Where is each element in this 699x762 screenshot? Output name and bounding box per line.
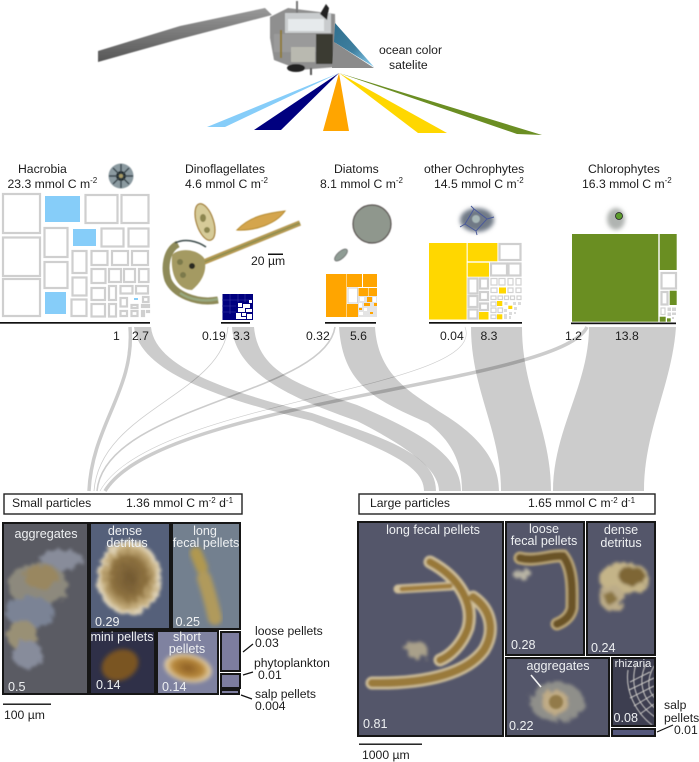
heading: Dinoflagellates — [185, 162, 265, 176]
scale bar: 100 µm — [3, 704, 51, 722]
axis — [221, 322, 250, 324]
ochrophyte image — [460, 206, 494, 235]
heading: 23.3 mmol C m — [8, 177, 90, 191]
treemap — [222, 294, 253, 320]
blue taxa — [45, 196, 138, 314]
value — [8, 527, 78, 694]
dinoflagellate micrograph — [166, 201, 300, 301]
panel: Chlorophytes — [565, 162, 677, 343]
scale bar: 20 µm: 20 µm — [251, 254, 285, 268]
labels: mini pellets — [90, 630, 154, 644]
labels: long — [193, 524, 217, 538]
panel: large dense detritus — [587, 522, 655, 655]
small minor categories: 0.004 — [255, 699, 286, 713]
heading — [8, 162, 98, 191]
labels: 0.14 — [162, 680, 187, 694]
small minor categories: 0.01 — [258, 668, 282, 682]
value: aggregates — [14, 527, 78, 541]
labels — [95, 524, 148, 629]
value: 8.3 — [480, 329, 498, 343]
labels: long fecal pellets — [386, 523, 480, 537]
labels: dense — [108, 524, 142, 538]
heading: small particles: 1.36 mmol C m — [126, 496, 209, 510]
large salp pellets: pellets — [664, 711, 699, 725]
heading: -2 — [665, 176, 672, 185]
treemap — [572, 234, 677, 322]
treemap — [326, 274, 377, 317]
labels: aggregates — [526, 659, 590, 673]
satellite body — [270, 1, 336, 75]
value: 0.32 — [306, 329, 330, 343]
heading: large particles: d — [618, 496, 628, 510]
labels — [90, 630, 154, 692]
heading: 14.5 mmol C m — [434, 177, 517, 191]
heading: small particles: -2 — [209, 496, 216, 505]
solar panel — [98, 8, 272, 62]
panel: small mini pellets — [90, 630, 155, 694]
treemap — [429, 243, 521, 320]
small minor categories: 0.03 — [255, 636, 279, 650]
labels: short — [173, 630, 201, 644]
labels: 0.08 — [614, 711, 638, 725]
labels: 0.24 — [591, 641, 616, 655]
scale bar: 1000 µm — [359, 744, 422, 762]
heading: Diatoms — [334, 162, 379, 176]
heading: large particles: -2 — [611, 496, 618, 505]
panel: small long fecal pellets — [172, 523, 240, 629]
labels: fecal pellets — [511, 534, 577, 548]
labels — [614, 658, 652, 725]
sankey flows — [89, 327, 676, 491]
panel: large rhizaria — [612, 658, 655, 726]
heading: other Ochrophytes — [424, 162, 524, 176]
heading: small particles: -1 — [226, 496, 234, 505]
heading — [424, 162, 524, 191]
labels: 0.14 — [96, 678, 121, 692]
panel: large aggregates — [506, 658, 609, 736]
heading: large particles: -1 — [628, 496, 636, 505]
value: 2.7 — [132, 329, 149, 343]
heading: 16.3 mmol C m — [582, 177, 665, 191]
panel: large long fecal pellets — [358, 522, 503, 736]
labels: loose — [529, 522, 559, 536]
axis — [429, 322, 522, 324]
heading: Chlorophytes — [588, 162, 660, 176]
treemap — [3, 194, 149, 316]
heading — [320, 162, 404, 191]
panel: Hacrobia — [0, 162, 150, 343]
large salp pellets: salp — [664, 698, 687, 712]
panel: small aggregates — [3, 523, 88, 694]
heading: 4.6 mmol C m — [185, 177, 261, 191]
labels — [511, 522, 577, 652]
satellite label — [379, 43, 442, 72]
cell image — [108, 164, 134, 188]
axis — [0, 322, 150, 324]
labels — [591, 523, 642, 655]
value: 5.6 — [350, 329, 367, 343]
small minor categories: salp pellets — [255, 687, 316, 701]
value: 1.2 — [565, 329, 582, 343]
panel: Dinoflagellates — [166, 162, 300, 343]
labels: detritus — [600, 536, 642, 550]
heading: 8.1 mmol C m — [320, 177, 396, 191]
large salp pellets — [612, 698, 699, 737]
colour rays — [207, 73, 542, 135]
satellite label: ocean color — [379, 43, 442, 57]
panel: Diatoms — [306, 162, 404, 343]
panel: large loose fecal pellets — [506, 522, 584, 655]
value: 1 — [113, 329, 120, 343]
heading: large particles — [359, 494, 655, 514]
sensor cone — [334, 23, 374, 67]
panel: small short pellets — [157, 630, 218, 694]
small minor categories: phytoplankton — [254, 656, 330, 670]
heading — [185, 162, 269, 191]
heading: -2 — [261, 176, 269, 185]
labels — [509, 659, 590, 733]
labels: dense — [604, 523, 638, 537]
value: 0.19 — [202, 329, 226, 343]
value: 13.8 — [615, 329, 639, 343]
heading: small particles — [4, 494, 242, 514]
labels — [173, 524, 239, 629]
scale bar: 1000 µm: 1000 µm — [362, 748, 410, 762]
heading: -2 — [90, 176, 98, 185]
labels: 0.28 — [511, 638, 536, 652]
labels: 0.29 — [95, 615, 120, 629]
heading: -2 — [396, 176, 404, 185]
heading: large particles: 1.65 mmol C m — [528, 496, 611, 510]
heading: small particles: d — [216, 496, 226, 510]
labels: 0.22 — [509, 719, 534, 733]
labels: pellets — [169, 642, 205, 656]
labels — [363, 523, 480, 731]
heading: small particles: Small particles — [12, 496, 91, 510]
scale bar: 100 µm: 100 µm — [4, 708, 45, 722]
satellite illustration — [98, 1, 374, 75]
labels: rhizaria — [615, 658, 652, 670]
heading: large particles: Large particles — [370, 496, 450, 510]
diatom image — [333, 205, 391, 263]
value: 0.04 — [440, 329, 464, 343]
heading: -2 — [517, 176, 524, 185]
small minor categories: loose pellets — [255, 624, 323, 638]
heading: Hacrobia — [18, 162, 67, 176]
satellite label: satelite — [389, 58, 428, 72]
labels — [162, 630, 205, 694]
axis — [325, 322, 376, 324]
large salp pellets: 0.01 — [674, 723, 698, 737]
small minor categories — [221, 624, 330, 713]
labels: 0.25 — [176, 615, 200, 629]
panel: other Ochrophytes — [424, 162, 524, 343]
chlorophyte image — [607, 208, 625, 230]
value: 3.3 — [233, 329, 250, 343]
labels: detritus — [106, 536, 148, 550]
heading — [582, 162, 672, 191]
panel: small dense detritus — [90, 523, 170, 629]
labels: fecal pellets — [173, 536, 239, 550]
value: 0.5 — [8, 680, 26, 694]
axis — [571, 322, 676, 324]
labels: 0.81 — [363, 717, 388, 731]
